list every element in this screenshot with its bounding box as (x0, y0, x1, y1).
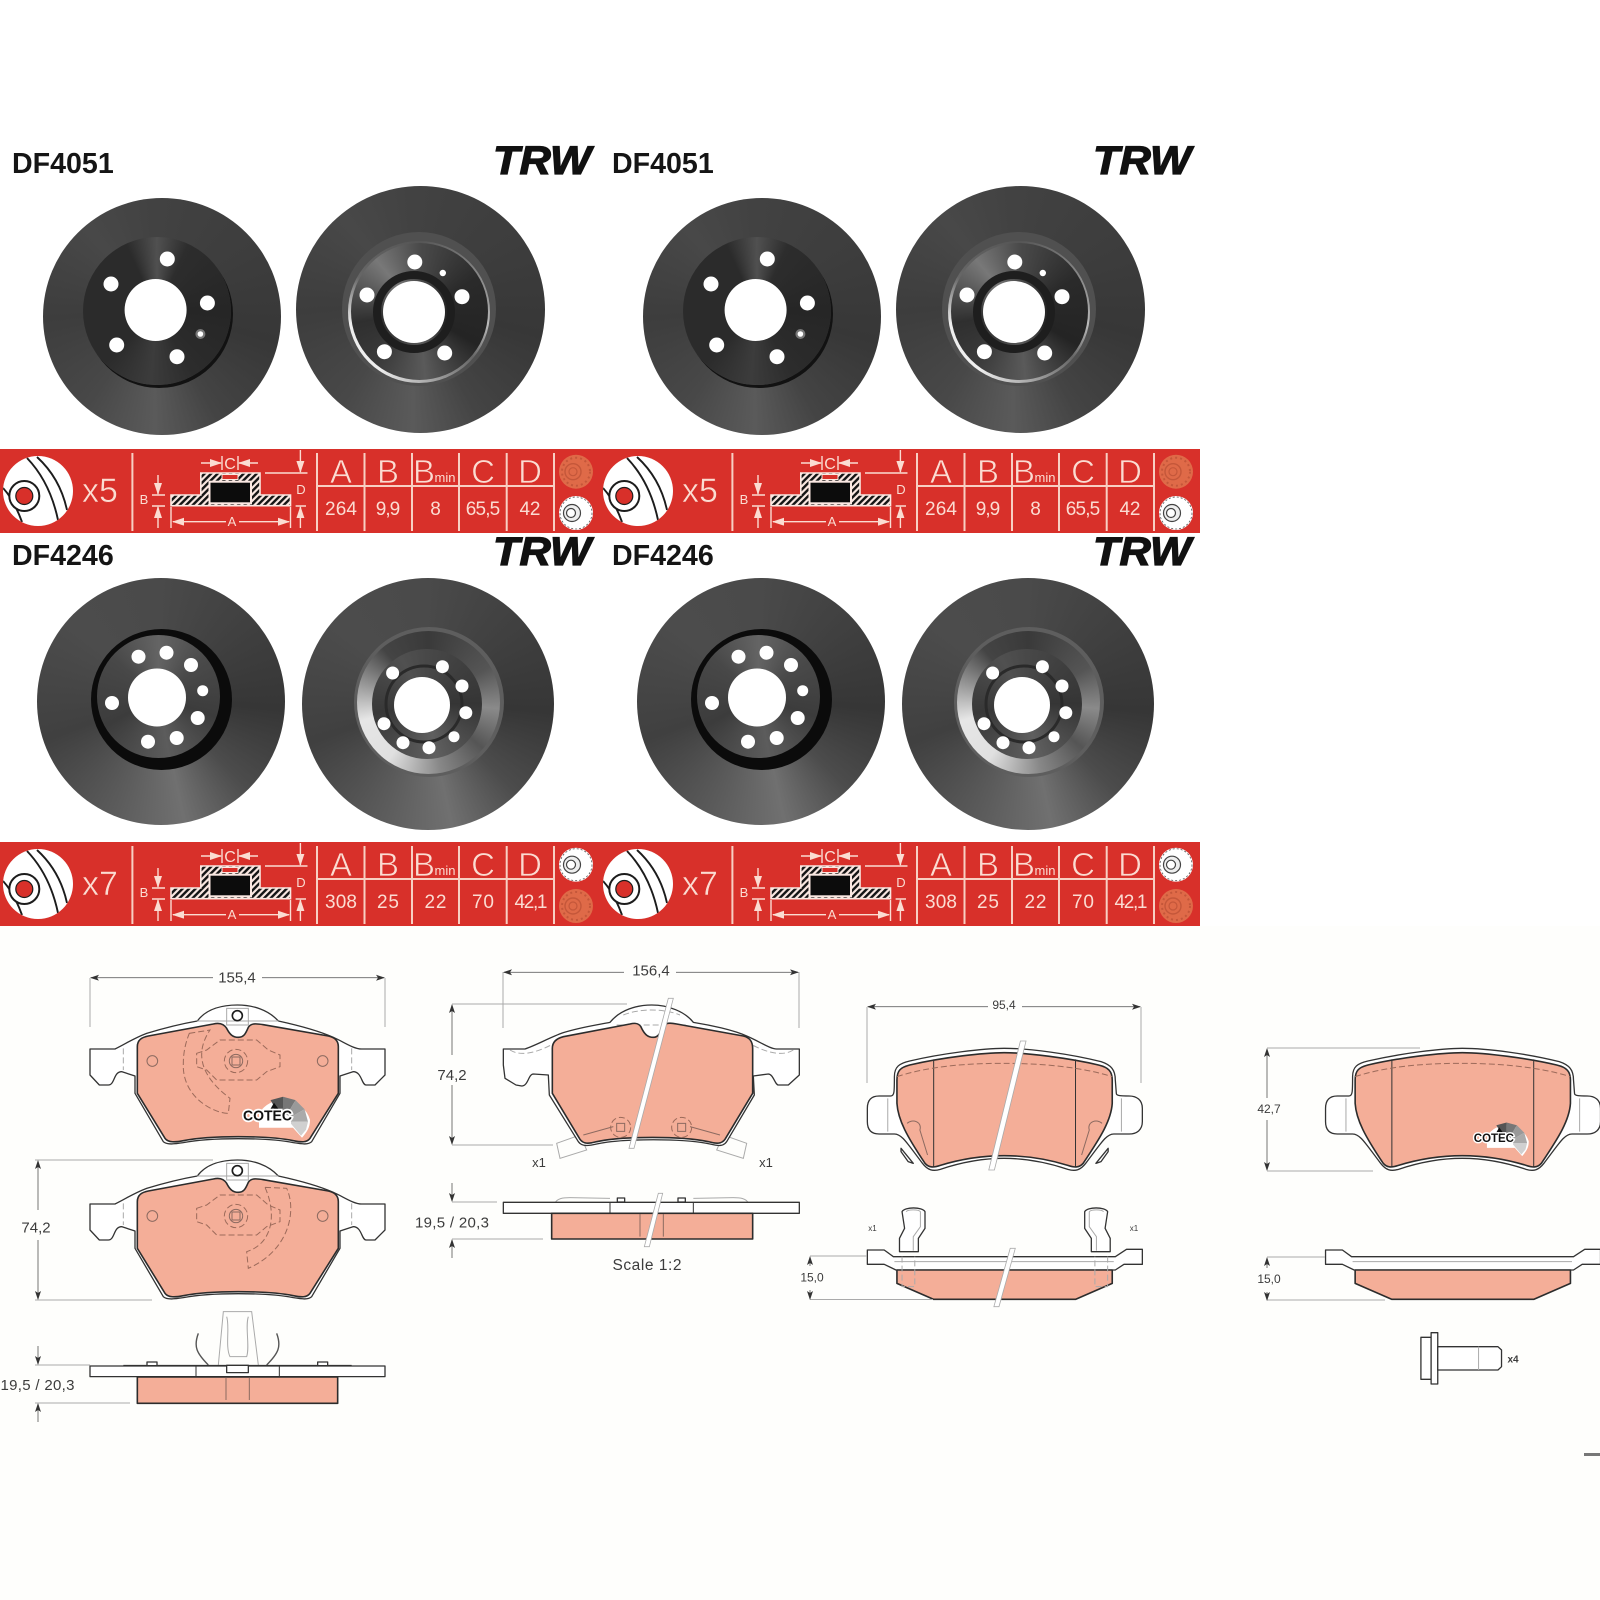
pad side view (503, 1193, 799, 1247)
spec bar: DF4246: A (228, 907, 237, 922)
spec bar: DF4246: 308 (325, 892, 357, 913)
spec bar: DF4051: A (930, 453, 952, 490)
label: x4: x4 (1507, 1355, 1519, 1366)
spec bar: DF4246: 25 (377, 892, 399, 913)
pad set B: front pad with clips (415, 962, 799, 1274)
disc rear view (302, 578, 554, 830)
spec bar: DF4051: B (140, 492, 148, 507)
spec bar: DF4051: D (896, 482, 906, 497)
spec bar: DF4246: x7 (682, 865, 718, 903)
spec bar: DF4051: min (435, 470, 455, 485)
spec bar: DF4051: B (1013, 453, 1035, 490)
spec bar: DF4246: D (1118, 846, 1142, 883)
spec bar: DF4246: 42,1 (514, 892, 548, 913)
labels: x1: x1 (868, 1224, 877, 1233)
pad with COTEC wear indicator (90, 1005, 385, 1144)
spec bar: DF4051: 8 (1030, 499, 1041, 520)
spec bar: DF4246 (600, 842, 1200, 926)
logo: TRW: TRW (493, 139, 595, 183)
dimension: height 74,2 (437, 1004, 627, 1145)
heading: DF4051: DF4051 (612, 148, 714, 180)
spec bar: DF4246: B (140, 885, 148, 900)
spec bar: DF4051: 9,9 (376, 499, 400, 520)
dimension: width 95,4: 95,4 (992, 998, 1016, 1012)
spec bar: DF4246: D (296, 875, 306, 890)
spec bar: DF4246: 25 (977, 892, 999, 913)
spec bar: DF4246: B (977, 846, 999, 883)
spec bar: DF4051: C (471, 453, 495, 490)
heading: DF4246: DF4246 (12, 540, 114, 572)
spec bar: DF4246: D (518, 846, 542, 883)
spec bar: DF4246: C (224, 849, 236, 866)
panel: disc DF4246 right (600, 530, 1200, 926)
spec bar: DF4051: 42 (1120, 499, 1140, 520)
logo: TRW: TRW (1093, 139, 1195, 183)
labels: x1: x1 (1130, 1224, 1139, 1233)
dimension: thickness 15,0 (1257, 1257, 1385, 1300)
spec bar: DF4246: 70 (472, 892, 494, 913)
labels: x1: x1 (759, 1155, 773, 1170)
disc front view (43, 198, 281, 435)
disc front view (643, 198, 881, 435)
spec bar: DF4051: 42 (520, 499, 540, 520)
spec bar: DF4246: B (377, 846, 399, 883)
logo: COTEC (1474, 1122, 1529, 1156)
heading: DF4051: DF4051 (12, 148, 114, 180)
logo: COTEC: COTEC (243, 1108, 292, 1125)
second pad (90, 1160, 385, 1299)
spec bar: DF4051: B (413, 453, 435, 490)
logo: COTEC: COTEC (1474, 1131, 1514, 1145)
break mark (629, 998, 673, 1148)
spec bar: DF4246: x7 (82, 865, 118, 903)
dimension: width 155,4: 155,4 (218, 970, 256, 986)
spec bar: DF4246 (0, 842, 600, 926)
pad drawings (0, 962, 1600, 1456)
disc rear view (296, 186, 545, 433)
dimension: thickness 15,0 (800, 1256, 933, 1300)
spec bar: DF4246: 42,1 (1114, 892, 1148, 913)
spec bar: DF4246: D (896, 875, 906, 890)
disc front view (637, 578, 885, 825)
dimension: width 95,4 (867, 998, 1141, 1083)
spec bar: DF4051: C (824, 456, 836, 473)
spec bar: DF4051: D (1118, 453, 1142, 490)
dimension: thickness 19,5 / 20,3 (415, 1183, 543, 1258)
dimension: height 74,2 (21, 1160, 213, 1300)
pad and side view (867, 1041, 1142, 1307)
pad and side view (1326, 1048, 1600, 1299)
spec bar: DF4051: C (1071, 453, 1095, 490)
spec bar: DF4051: min (1035, 470, 1055, 485)
disc rear view (896, 186, 1145, 433)
labels: x1: x1 (532, 1155, 546, 1170)
spec bar: DF4051: 264 (325, 499, 357, 520)
spec bar: DF4246: 70 (1072, 892, 1094, 913)
spec bar: DF4246: C (471, 846, 495, 883)
icon: bolt (1421, 1333, 1502, 1384)
dimension: width 155,4 (90, 970, 385, 1027)
spec bar: DF4051: A (828, 514, 837, 529)
spec bar: DF4051: C (224, 456, 236, 473)
spec bar: DF4051: 65,5 (1066, 499, 1100, 520)
spec bar: DF4051: x5 (682, 472, 718, 510)
logo: TRW: TRW (493, 530, 595, 574)
heading: DF4246: DF4246 (612, 540, 714, 572)
spec bar: DF4051: 264 (925, 499, 957, 520)
spec bar: DF4246: 22 (424, 892, 446, 913)
dimension: height 42,7 (1257, 1048, 1420, 1171)
dimension: thickness 15,0: 15,0 (800, 1271, 824, 1285)
spec bar: DF4246: A (930, 846, 952, 883)
spec bar: DF4051: 9,9 (976, 499, 1000, 520)
spec bar: DF4051: A (330, 453, 352, 490)
spec bar: DF4051: D (518, 453, 542, 490)
panel: disc DF4051 left (0, 139, 600, 533)
spec bar: DF4246: B (1013, 846, 1035, 883)
disc rear view (902, 578, 1154, 830)
dimension: width 156,4: 156,4 (632, 962, 670, 980)
logo: TRW: TRW (1093, 530, 1195, 574)
labels: x1 (532, 1155, 773, 1170)
spec bar: DF4246: min (1035, 863, 1055, 878)
panel: disc DF4246 left (0, 530, 600, 926)
labels: x1 (868, 1224, 1139, 1233)
spec bar: DF4246: min (435, 863, 455, 878)
dimension: thickness 15,0: 15,0 (1257, 1272, 1281, 1286)
disc front view (37, 578, 285, 825)
spec bar: DF4051 (0, 449, 600, 533)
dimension: thickness 19,5 / 20,3: 19,5 / 20,3 (415, 1214, 489, 1232)
logo: COTEC (243, 1097, 310, 1138)
pad side view (90, 1312, 385, 1403)
dimension: height 74,2: 74,2 (437, 1067, 467, 1084)
spec bar: DF4246: A (828, 907, 837, 922)
spec bar: DF4051: 65,5 (466, 499, 500, 520)
spec bar: DF4051: B (977, 453, 999, 490)
spec bar: DF4051: x5 (82, 472, 118, 510)
pad outline (503, 998, 799, 1158)
label: scale: Scale 1:2 (612, 1257, 682, 1274)
spec bar: DF4246: 308 (925, 892, 957, 913)
pad set A: front pads with dimensions (0, 970, 385, 1422)
dimension: thickness 19,5 / 20,3 (0, 1346, 130, 1422)
spec bar: DF4051: B (740, 492, 748, 507)
dimension: height 42,7: 42,7 (1257, 1102, 1281, 1116)
panel: disc DF4051 right (600, 139, 1200, 533)
spec bar: DF4246: B (413, 846, 435, 883)
spec bar: DF4051 (600, 449, 1200, 533)
spec bar: DF4246: 22 (1024, 892, 1046, 913)
dimension: thickness 19,5 / 20,3: 19,5 / 20,3 (0, 1377, 74, 1394)
spec bar: DF4246: A (330, 846, 352, 883)
spec bar: DF4051: B (377, 453, 399, 490)
dimension: width 156,4 (503, 962, 799, 1028)
spec bar: DF4246: C (1071, 846, 1095, 883)
pad set D: rear pad with COTEC (1257, 1048, 1600, 1384)
spec bar: DF4246: B (740, 885, 748, 900)
pad set C: rear pad with clips (800, 998, 1142, 1307)
spec bar: DF4051: A (228, 514, 237, 529)
spec bar: DF4051: 8 (430, 499, 441, 520)
spec bar: DF4051: D (296, 482, 306, 497)
dimension: height 74,2: 74,2 (21, 1220, 51, 1236)
spec bar: DF4246: C (824, 849, 836, 866)
